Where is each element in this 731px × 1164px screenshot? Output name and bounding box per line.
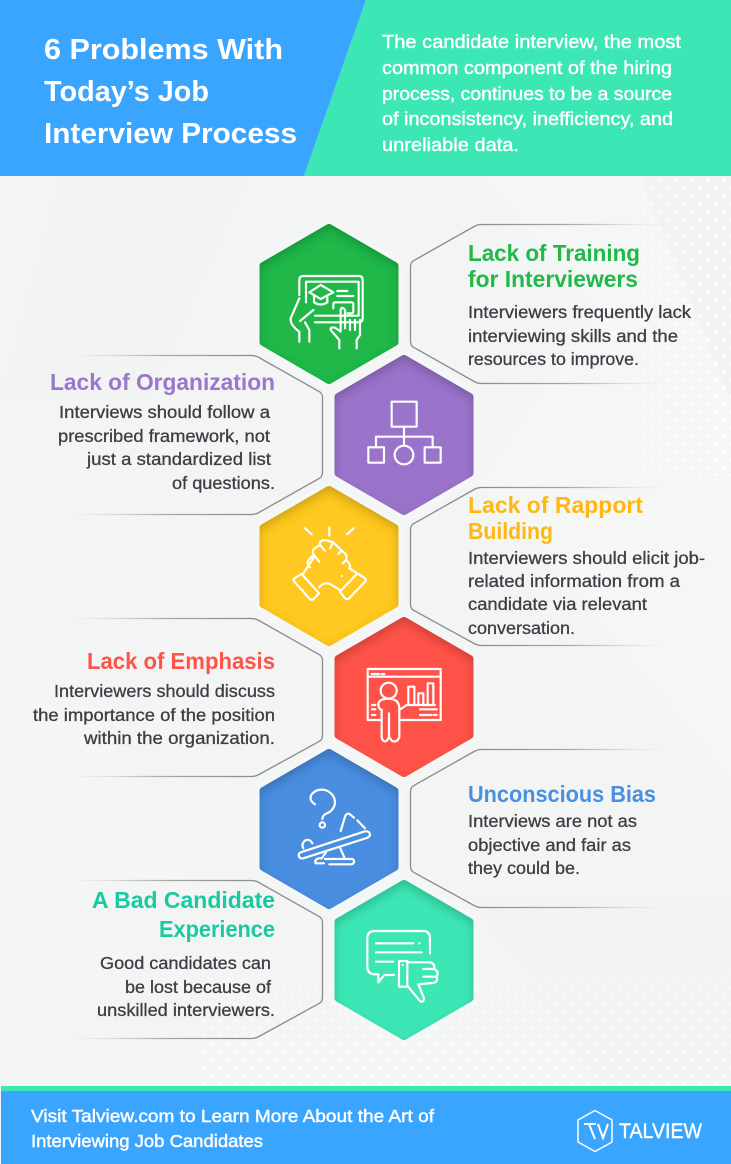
- header panel: title block: [0, 0, 366, 176]
- hexagon: yellow: [264, 490, 394, 642]
- icon: organization chart: [368, 402, 441, 464]
- hexagon: purple: [338, 359, 470, 511]
- heading: Lack of Organization: [50, 369, 275, 395]
- body text: [468, 302, 691, 369]
- body text: interviewing skills and the: [468, 326, 678, 346]
- body text: [468, 548, 705, 638]
- hexagon: red: [338, 621, 470, 773]
- panel: Lack of Training for Interviewers: [410, 224, 691, 384]
- icon: question mark and seesaw: [299, 790, 370, 864]
- footer text: Interviewing Job Candidates: [31, 1131, 263, 1151]
- panel: Lack of Rapport Building: [410, 488, 705, 646]
- body text: related information from a: [468, 571, 680, 591]
- heading: Building: [468, 518, 553, 544]
- body text: unskilled interviewers.: [97, 1000, 275, 1020]
- logo: Talview: TALVIEW: [619, 1120, 702, 1143]
- body text: Interviewers should discuss: [54, 681, 275, 701]
- body text: of questions.: [172, 473, 275, 493]
- hexagon: green: [264, 228, 394, 380]
- body text: just a standardized list: [86, 449, 271, 469]
- body text: [58, 402, 275, 493]
- panel: Lack of Emphasis: [33, 618, 322, 776]
- heading: Lack of Emphasis: [87, 648, 275, 674]
- heading: Experience: [159, 916, 275, 942]
- body text: Interviews are not as: [468, 811, 637, 831]
- body text: Interviewers should elicit job-: [468, 548, 705, 568]
- heading: [468, 492, 643, 544]
- footer text: [31, 1106, 434, 1151]
- title: 6 Problems With: [44, 34, 283, 66]
- body text: the importance of the position: [33, 705, 275, 725]
- body text: Good candidates can: [100, 953, 271, 973]
- body text: candidate via relevant: [468, 594, 647, 614]
- header panel: introduction: [304, 0, 731, 176]
- intro text: unreliable data.: [382, 135, 519, 155]
- background: [706, 178, 731, 476]
- heading: [92, 887, 275, 942]
- heading: Unconscious Bias: [468, 781, 656, 807]
- title: Today’s Job: [44, 76, 209, 108]
- heading: for Interviewers: [468, 266, 638, 292]
- intro text: common component of the hiring: [382, 58, 672, 78]
- heading: A Bad Candidate: [92, 887, 275, 913]
- body text: [33, 681, 275, 748]
- icon: tablet with graduation cap and hands: [291, 276, 363, 348]
- body text: conversation.: [468, 618, 575, 638]
- title: [44, 34, 297, 150]
- body text: they could be.: [468, 858, 580, 878]
- body text: Interviews should follow a: [59, 402, 270, 422]
- hexagon: blue: [264, 753, 394, 905]
- logo: Talview: [578, 1110, 702, 1152]
- body text: resources to improve.: [468, 349, 639, 369]
- body text: prescribed framework, not: [58, 426, 270, 446]
- heading: Lack of Training: [468, 240, 640, 266]
- footer band: [1, 1086, 731, 1164]
- panel: Unconscious Bias: [410, 750, 665, 908]
- intro text: of inconsistency, inefficiency, and: [382, 109, 673, 129]
- intro text: [382, 32, 681, 155]
- intro text: The candidate interview, the most: [382, 32, 681, 52]
- body text: [97, 953, 275, 1020]
- panel: A Bad Candidate Experience: [70, 880, 322, 1038]
- icon: presenter with chart: [368, 669, 441, 741]
- icon: message bubble with thumbs down: [367, 931, 438, 1002]
- body text: Interviewers frequently lack: [468, 302, 691, 322]
- body text: be lost because of: [125, 977, 271, 997]
- body text: [468, 811, 637, 878]
- title: Interview Process: [44, 118, 297, 150]
- icon: clasped hands: [293, 527, 366, 600]
- heading: [468, 240, 640, 292]
- heading: Lack of Rapport: [468, 492, 643, 518]
- hexagon: teal: [338, 884, 470, 1036]
- panel: Lack of Organization: [50, 356, 322, 514]
- intro text: process, continues to be a source: [382, 84, 672, 104]
- footer text: Visit Talview.com to Learn More About the Art of: [31, 1106, 434, 1126]
- body text: within the organization.: [83, 728, 275, 748]
- body text: objective and fair as: [468, 835, 631, 855]
